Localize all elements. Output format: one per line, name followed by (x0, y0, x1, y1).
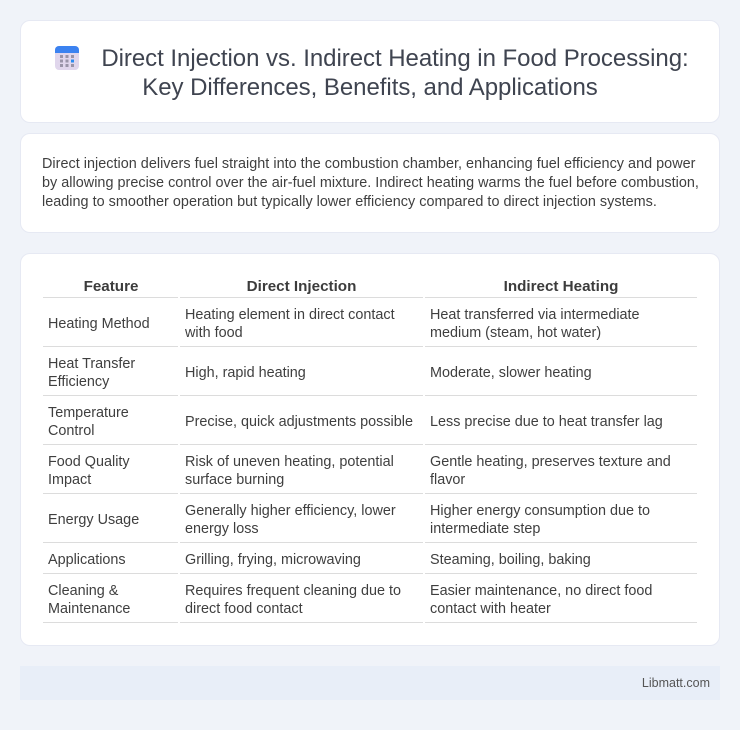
row: energy usage: Energy Usage (48, 512, 139, 528)
row: cleaning and maintenance: Cleaning & (48, 583, 118, 599)
heading: Key Differences, Benefits, and Applications (142, 74, 598, 101)
row: cleaning and maintenance: contact with heater (430, 601, 551, 617)
row: energy usage (48, 503, 650, 537)
row: temperature control: Temperature (48, 405, 129, 421)
row: applications: Grilling, frying, microwaving (185, 552, 361, 568)
footer bar (20, 666, 720, 700)
title card (20, 20, 720, 123)
row: heat transfer efficiency: Heat Transfer (48, 356, 135, 372)
table card (20, 253, 720, 646)
row: energy usage: energy loss (185, 521, 259, 537)
row: heat transfer efficiency: High, rapid heating (185, 365, 306, 381)
intro text: Direct injection delivers fuel straight into the combustion chamber, enhancing fuel efficiency and power (42, 156, 695, 172)
row: energy usage: intermediate step (430, 521, 540, 537)
row: heating method: Heat transferred via intermediate (430, 307, 640, 323)
row: heating method: with food (185, 325, 243, 341)
row: heat transfer efficiency: Moderate, slower heating (430, 365, 592, 381)
row: temperature control (48, 405, 663, 439)
row: food quality impact: Food Quality (48, 454, 130, 470)
intro text: by allowing precise control over the air-fuel mixture. Indirect heating warms the fuel before combustion, (42, 175, 699, 191)
heading (101, 45, 689, 101)
row: heating method: Heating Method (48, 316, 150, 332)
table header: Direct Injection (247, 278, 356, 295)
row: food quality impact (48, 454, 671, 488)
row: applications: Applications (48, 552, 126, 568)
row: food quality impact: Gentle heating, preserves texture and (430, 454, 671, 470)
row: applications (48, 552, 591, 568)
row: cleaning and maintenance: Easier maintenance, no direct food (430, 583, 652, 599)
icon: calendar grid (55, 46, 79, 70)
row: food quality impact: Risk of uneven heating, potential (185, 454, 394, 470)
table header: Feature (84, 278, 138, 295)
row: heat transfer efficiency (48, 356, 592, 390)
intro text (42, 156, 699, 210)
row: heating method: Heating element in direct contact (185, 307, 395, 323)
row: heating method: medium (steam, hot water) (430, 325, 601, 341)
table header (84, 278, 618, 295)
row: applications: Steaming, boiling, baking (430, 552, 591, 568)
intro text: leading to smoother operation but typically lower efficiency compared to direct injection systems. (42, 194, 657, 210)
row: cleaning and maintenance: direct food contact (185, 601, 303, 617)
row: cleaning and maintenance: Maintenance (48, 601, 130, 617)
row: temperature control: Less precise due to heat transfer lag (430, 414, 663, 430)
comparison table (43, 278, 697, 623)
row: food quality impact: Impact (48, 472, 91, 488)
row: food quality impact: flavor (430, 472, 465, 488)
footer text: Libmatt.com (642, 676, 710, 690)
row: temperature control: Precise, quick adjustments possible (185, 414, 413, 430)
row: temperature control: Control (48, 423, 94, 439)
intro card (20, 133, 720, 233)
heading: Direct Injection vs. Indirect Heating in Food Processing: (101, 45, 689, 72)
row: energy usage: Generally higher efficiency, lower (185, 503, 396, 519)
table header: Indirect Heating (504, 278, 618, 295)
row: heating method (48, 307, 640, 341)
row: cleaning and maintenance (48, 583, 652, 617)
row: heat transfer efficiency: Efficiency (48, 374, 109, 390)
row: energy usage: Higher energy consumption due to (430, 503, 650, 519)
row: cleaning and maintenance: Requires frequent cleaning due to (185, 583, 401, 599)
row: food quality impact: surface burning (185, 472, 284, 488)
